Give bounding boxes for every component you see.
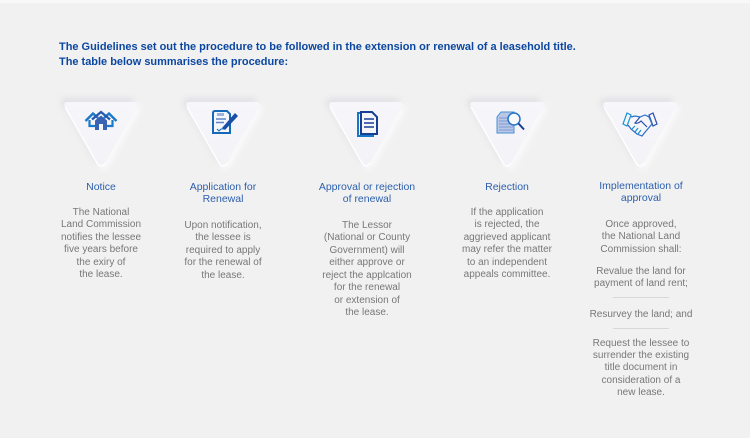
text: notice bbox=[61, 207, 141, 280]
icon: form and pen bbox=[213, 111, 238, 133]
text: request bbox=[593, 338, 689, 398]
heading: rejection: Rejection bbox=[485, 181, 529, 193]
text: request: surrender the existing bbox=[593, 350, 689, 361]
heading: application: Application for bbox=[190, 181, 256, 193]
triangle: approval bbox=[326, 99, 406, 169]
triangle: application bbox=[183, 99, 263, 169]
text: approval: the lease. bbox=[345, 307, 389, 318]
text: rejection: to an independent bbox=[467, 257, 547, 268]
text: application: for the renewal of bbox=[184, 257, 262, 268]
title: The table below summarises the procedure: bbox=[59, 56, 288, 68]
text: application: the lease. bbox=[201, 270, 245, 281]
icon: houses bbox=[86, 112, 116, 130]
text: approval: for the renewal bbox=[334, 282, 400, 293]
text: notice: the lease. bbox=[79, 269, 123, 280]
text: application: required to apply bbox=[186, 245, 260, 256]
text: application: Upon notification, bbox=[184, 220, 262, 231]
text: rejection: appeals committee. bbox=[464, 269, 550, 280]
heading: approval: Approval or rejection bbox=[319, 181, 415, 193]
heading: application: Renewal bbox=[203, 193, 243, 205]
title: The Guidelines set out the procedure to be followed in the extension or renewal of a leasehold title. bbox=[59, 41, 576, 53]
text: approval: The Lessor bbox=[342, 220, 392, 231]
text: notice: notifies the lessee bbox=[61, 232, 141, 243]
text: rejection: aggrieved applicant bbox=[464, 232, 550, 243]
heading: implementation bbox=[599, 180, 683, 204]
title bbox=[59, 41, 576, 68]
text: rejection: If the application bbox=[471, 207, 543, 218]
text: implementation: the National Land bbox=[602, 231, 680, 242]
heading: implementation: approval bbox=[621, 192, 661, 204]
triangle: implementation bbox=[600, 99, 680, 169]
text: notice: Land Commission bbox=[61, 219, 141, 230]
text: approval: Government) will bbox=[329, 245, 405, 256]
icon: handshake bbox=[623, 113, 657, 136]
heading: application bbox=[190, 181, 256, 205]
text: approval: or extension of bbox=[334, 295, 400, 306]
text: revalue bbox=[594, 266, 688, 289]
triangle: rejection bbox=[467, 99, 547, 169]
text: implementation bbox=[600, 219, 682, 255]
text: revalue: Revalue the land for bbox=[596, 266, 686, 277]
text: implementation: Once approved, bbox=[605, 219, 677, 230]
text: request: title document in bbox=[605, 362, 677, 373]
text: application bbox=[184, 220, 262, 281]
text: notice: the exiry of bbox=[77, 257, 125, 268]
text: rejection: is rejected, the bbox=[474, 219, 540, 230]
text: application: the lessee is bbox=[195, 232, 251, 243]
icon: documents bbox=[358, 112, 377, 136]
icon: document and magnifier bbox=[497, 112, 524, 133]
text: request: Request the lessee to bbox=[593, 338, 689, 348]
text: rejection bbox=[462, 207, 552, 280]
text: rejection: may refer the matter bbox=[462, 244, 552, 255]
text: approval bbox=[322, 220, 412, 318]
text: revalue: payment of land rent; bbox=[594, 278, 688, 289]
text: implementation: Commission shall: bbox=[600, 244, 682, 255]
heading: notice: Notice bbox=[86, 181, 116, 193]
heading: implementation: Implementation of bbox=[599, 180, 683, 192]
text: approval: reject the applcation bbox=[322, 270, 412, 281]
text: notice: five years before bbox=[64, 244, 138, 255]
text: request: new lease. bbox=[617, 387, 665, 398]
text: resurvey: Resurvey the land; and bbox=[590, 309, 692, 320]
text: approval: (National or County bbox=[324, 232, 410, 243]
triangle: notice bbox=[61, 99, 141, 169]
text: notice: The National bbox=[73, 207, 129, 218]
heading: approval: of renewal bbox=[343, 193, 391, 205]
text: request: consideration of a bbox=[602, 375, 680, 386]
heading: approval bbox=[318, 181, 415, 205]
text: approval: either approve or bbox=[329, 257, 405, 268]
